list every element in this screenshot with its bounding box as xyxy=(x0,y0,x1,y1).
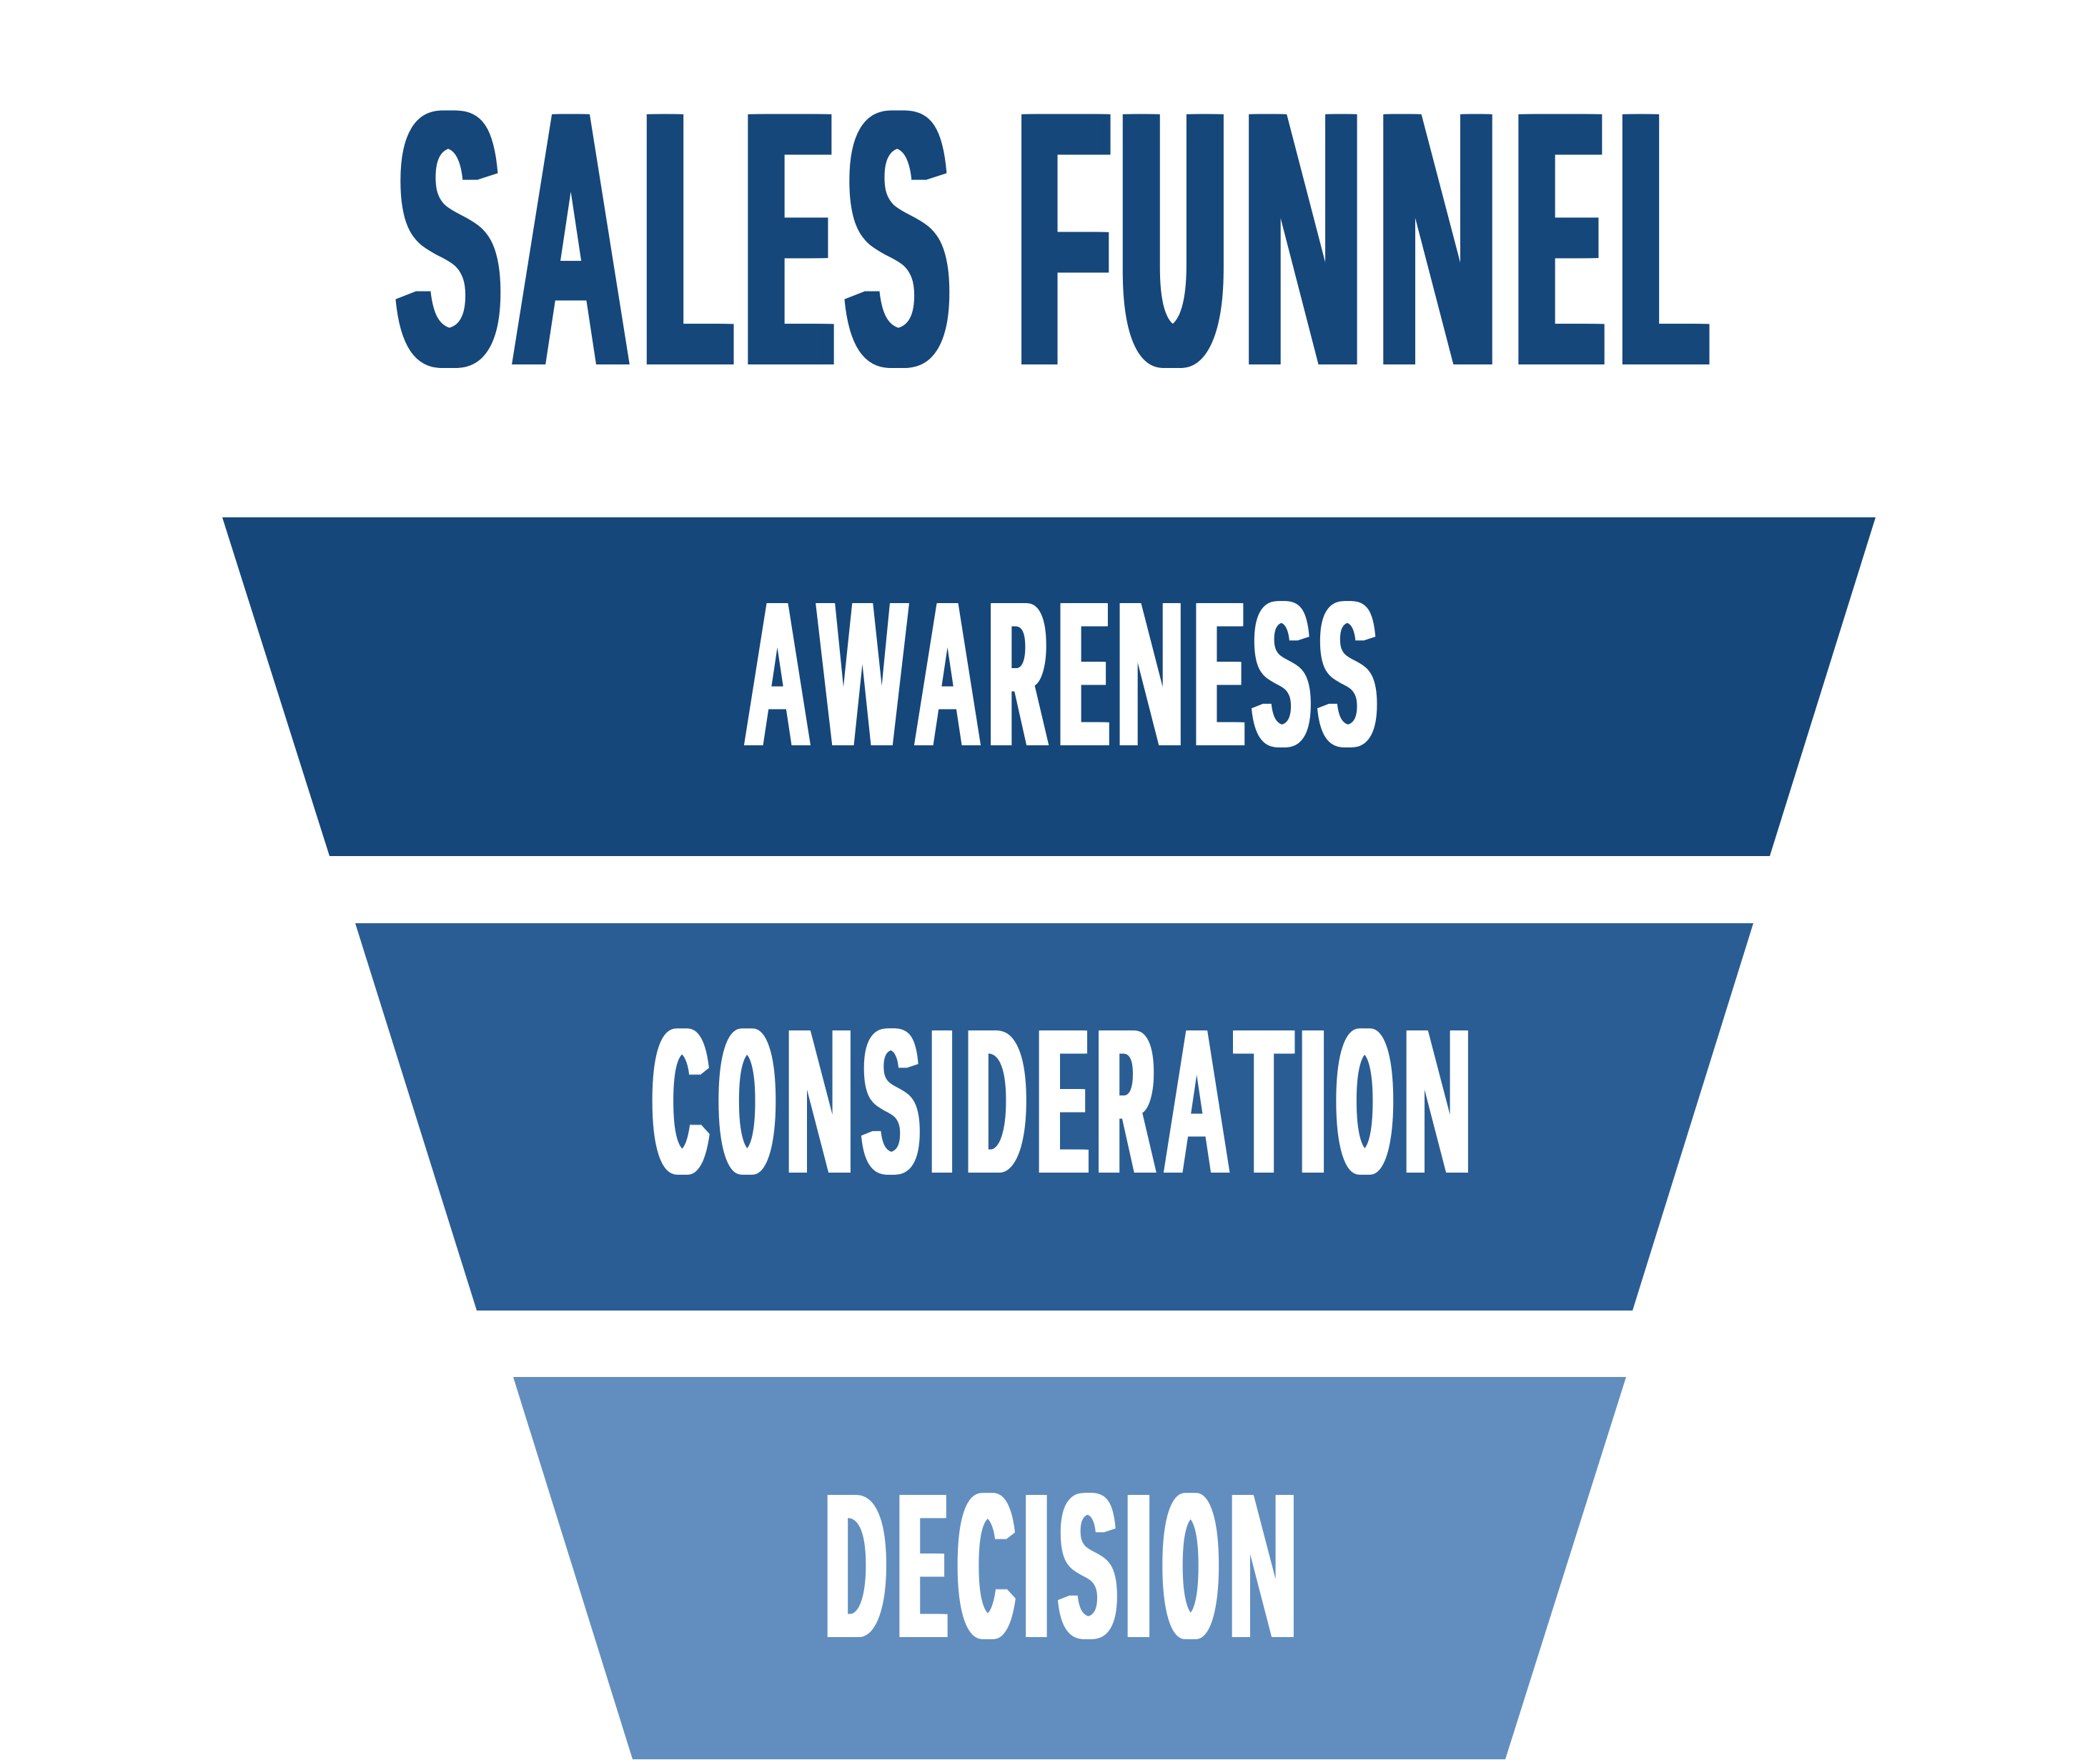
label: decision xyxy=(828,1493,1294,1639)
label: consideration: R xyxy=(1099,986,1153,1217)
title: S xyxy=(847,35,949,442)
label: decision: S xyxy=(1059,1451,1116,1681)
title: L xyxy=(1622,35,1705,442)
label: awareness: A xyxy=(915,559,980,790)
label: consideration: N xyxy=(1403,986,1472,1217)
label: consideration xyxy=(652,1028,1468,1175)
label: awareness: S xyxy=(1319,559,1377,790)
title: N xyxy=(1243,35,1362,442)
panel: decision funnel stage xyxy=(513,1377,1626,1759)
title: E xyxy=(750,35,828,442)
title: L xyxy=(646,35,729,442)
label: awareness: S xyxy=(1253,559,1310,790)
label: awareness: A xyxy=(745,559,810,790)
title: S xyxy=(398,35,500,442)
label: consideration: I xyxy=(1302,986,1324,1217)
label: decision: N xyxy=(1229,1451,1297,1681)
label: decision: I xyxy=(1025,1451,1046,1681)
label: awareness: N xyxy=(1116,559,1184,790)
title: N xyxy=(1377,35,1499,442)
title xyxy=(395,35,1710,442)
label: decision: D xyxy=(826,1451,885,1681)
label: decision: O xyxy=(1165,1451,1217,1681)
label: consideration: D xyxy=(967,986,1025,1217)
label: decision: E xyxy=(901,1451,945,1681)
label: awareness: W xyxy=(818,559,906,790)
panel: awareness funnel stage xyxy=(222,517,1876,856)
label: consideration: O xyxy=(721,986,773,1217)
label: awareness: R xyxy=(991,559,1045,790)
label: awareness xyxy=(743,601,1377,747)
label: consideration: N xyxy=(786,986,854,1217)
label: consideration: A xyxy=(1164,986,1229,1217)
label: consideration: E xyxy=(1040,986,1086,1217)
title: U xyxy=(1123,35,1224,442)
label: consideration: T xyxy=(1235,986,1292,1217)
title: A xyxy=(513,35,628,442)
label: consideration: C xyxy=(655,986,706,1217)
label: consideration: S xyxy=(863,986,919,1217)
label: decision: C xyxy=(960,1451,1012,1681)
label: awareness: E xyxy=(1197,559,1242,790)
title: E xyxy=(1520,35,1599,442)
label: consideration: I xyxy=(932,986,952,1217)
panel: consideration funnel stage xyxy=(355,923,1753,1311)
title: F xyxy=(1019,35,1109,442)
label: decision: I xyxy=(1127,1451,1150,1681)
label: consideration: O xyxy=(1339,986,1391,1217)
label: awareness: E xyxy=(1061,559,1106,790)
